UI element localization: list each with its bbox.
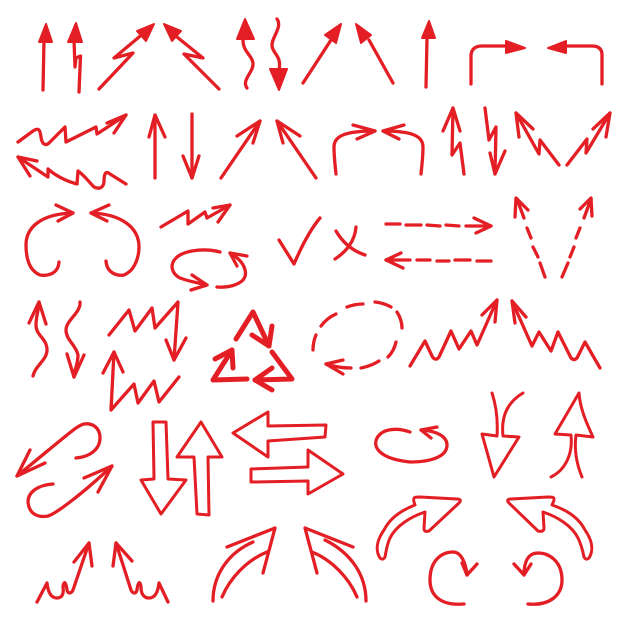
arrow: double arc right bbox=[213, 528, 275, 601]
triangle arrow: top bbox=[236, 312, 272, 346]
arrow: lightning up left thin bbox=[516, 113, 559, 165]
arrow: curved corner left bbox=[383, 125, 423, 174]
arrow: diagonal up right bbox=[303, 24, 341, 83]
arrow: double arc left bbox=[305, 528, 366, 601]
cross mark bbox=[335, 227, 365, 259]
arrow: thin down bbox=[183, 114, 199, 178]
arrow: lightning up right bbox=[99, 24, 154, 89]
arrow: curved corner right bbox=[334, 125, 375, 174]
arrow: lightning down thin bbox=[485, 108, 505, 174]
arrow: thin diagonal right bbox=[221, 121, 260, 178]
arrow: diagonal up left bbox=[356, 24, 393, 83]
arrow: loop right bbox=[91, 205, 139, 275]
block arrow: curved right bbox=[377, 497, 460, 559]
arrow: straight up bbox=[39, 24, 52, 90]
block arrow: right bbox=[251, 450, 343, 494]
arrow: sawtooth down bbox=[109, 302, 186, 360]
arrow: dashed up left bbox=[515, 198, 545, 277]
recycling triangle arrows bbox=[213, 312, 292, 390]
arrow: corner right bbox=[471, 41, 525, 84]
arrow: zigzag left bbox=[18, 157, 126, 188]
arrow: swirl left bbox=[17, 424, 100, 476]
block arrow: down bbox=[141, 422, 186, 514]
arrow: w-curve up left bbox=[113, 543, 168, 602]
block arrow: curved tail up bbox=[551, 393, 593, 477]
arrow: tall straight up bbox=[422, 21, 435, 87]
arrow: dashed oval bbox=[313, 302, 402, 374]
arrow: dashed up right bbox=[562, 198, 592, 277]
arrow: dashed left bbox=[386, 253, 491, 268]
block arrow: left bbox=[233, 412, 326, 457]
arrow: zigzag right bbox=[18, 115, 126, 145]
arrow: ellipse loop bbox=[376, 427, 447, 462]
arrow: lightning up left bbox=[164, 24, 219, 89]
arrow: loop left bbox=[26, 205, 73, 275]
arrow: mountain zigzag left bbox=[512, 301, 600, 368]
arrow: corner left bbox=[548, 41, 602, 84]
arrow: lightning up right thin bbox=[567, 113, 610, 165]
block arrow: curved left bbox=[508, 497, 592, 559]
arrow: wavy thin down bbox=[66, 302, 84, 377]
triangle arrow: right bbox=[255, 352, 292, 390]
arrow: up with jog bbox=[68, 23, 82, 92]
arrow: swirl right bbox=[28, 466, 112, 516]
arrow: small bolt bbox=[161, 205, 230, 227]
arrow: thin up bbox=[149, 115, 165, 178]
arrow: sawtooth up bbox=[103, 352, 179, 410]
arrow: wavy down bbox=[270, 19, 287, 90]
arrow: lightning up thin bbox=[443, 108, 464, 174]
triangle arrow: left bbox=[213, 350, 247, 380]
arrow: mountain zigzag right bbox=[410, 300, 497, 366]
arrow: wavy up bbox=[237, 19, 254, 88]
arrow: wavy thin up bbox=[29, 302, 47, 376]
arrow: thin diagonal left bbox=[277, 121, 316, 178]
arrow: c-loop right bbox=[430, 552, 477, 604]
check mark bbox=[279, 218, 320, 264]
block arrow: curved tail down bbox=[482, 393, 523, 477]
arrows: circular pair bbox=[172, 250, 247, 290]
arrow: c-loop left bbox=[514, 553, 562, 604]
arrow: w-curve up right bbox=[37, 543, 92, 602]
arrow: dashed right bbox=[386, 218, 491, 233]
block arrow: up bbox=[177, 422, 222, 515]
